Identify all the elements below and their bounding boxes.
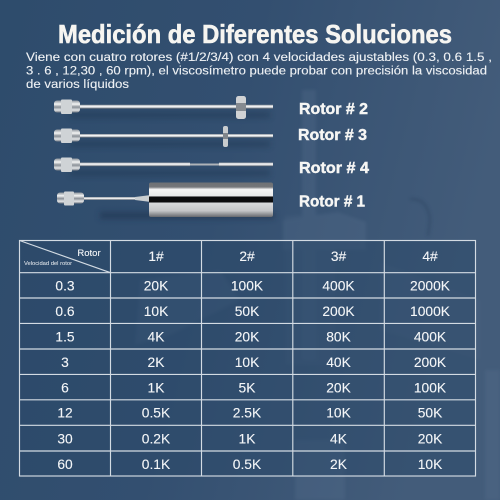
table header: 2# xyxy=(239,249,255,264)
table rows: 1.5 xyxy=(55,329,75,344)
table rows: 5K xyxy=(239,380,256,395)
table rows: 30 xyxy=(57,431,73,446)
table rows: 400K xyxy=(414,329,447,344)
title: Medición de Diferentes Soluciones xyxy=(58,19,452,49)
viscosity table xyxy=(20,240,476,476)
table rows: 200K xyxy=(322,304,355,319)
table rows: 100K xyxy=(414,380,447,395)
table rows: 0.3 xyxy=(55,279,75,294)
rotor labels: Rotor # 1 xyxy=(299,194,365,210)
table rows: 50K xyxy=(418,406,443,421)
table rows: 4K xyxy=(148,329,165,344)
table rows: 0.5K xyxy=(142,406,171,421)
table rows: 20K xyxy=(326,380,352,395)
table header: 4# xyxy=(422,249,438,264)
table header: Velocidad del rotor xyxy=(24,261,72,267)
table rows: 2000K xyxy=(410,279,451,294)
table rows: 1K xyxy=(239,431,256,446)
table rows: 0.5K xyxy=(233,457,262,472)
table rows: 0.6 xyxy=(55,304,75,319)
table rows: 60 xyxy=(57,457,73,472)
table header: 3# xyxy=(331,249,346,264)
table rows: 2.5K xyxy=(233,406,262,421)
table rows: 20K xyxy=(235,329,260,344)
table rows: 3 xyxy=(61,355,69,370)
table rows: 0.2K xyxy=(142,431,171,446)
table header xyxy=(24,248,438,267)
table rows: 2K xyxy=(148,355,165,370)
rotor labels: Rotor # 3 xyxy=(298,127,367,144)
table rows: 10K xyxy=(144,304,169,319)
rotor labels xyxy=(298,101,369,210)
table rows: 1K xyxy=(148,380,165,395)
description text: Viene con cuatro rotores (#1/2/3/4) con 4 velocidades ajustables (0.3, 0.6 1.5 , xyxy=(26,50,492,64)
rotor 2 xyxy=(54,96,273,119)
description text: 3 . 6 , 12,30 , 60 rpm), el viscosímetro puede probar con precisión la viscosidad xyxy=(26,64,487,78)
table rows: 200K xyxy=(414,355,447,370)
table rows: 80K xyxy=(326,329,352,344)
table rows: 50K xyxy=(235,304,260,319)
rotor labels: Rotor # 2 xyxy=(299,101,368,118)
table rows: 4K xyxy=(330,431,348,446)
table rows: 100K xyxy=(231,279,264,294)
table header: 1# xyxy=(148,249,164,264)
table header: Rotor xyxy=(77,248,101,259)
table rows: 12 xyxy=(57,406,73,421)
table rows: 10K xyxy=(418,457,443,472)
table rows: 1000K xyxy=(410,304,451,319)
table rows: 400K xyxy=(322,279,355,294)
table rows: 0.1K xyxy=(142,457,171,472)
rotor 3 xyxy=(54,126,273,147)
table rows: 2K xyxy=(330,457,348,472)
table rows: 10K xyxy=(235,355,260,370)
rotor labels: Rotor # 4 xyxy=(299,160,369,177)
table rows: 10K xyxy=(326,406,352,421)
description text: de varios líquidos xyxy=(26,77,129,91)
rotor 4 xyxy=(54,158,273,176)
rotor 1 xyxy=(57,182,275,219)
description text xyxy=(26,50,492,91)
table rows: 20K xyxy=(418,431,443,446)
table rows: 20K xyxy=(144,279,169,294)
table rows: 40K xyxy=(326,355,352,370)
table rows xyxy=(55,279,451,472)
table rows: 6 xyxy=(61,380,69,395)
